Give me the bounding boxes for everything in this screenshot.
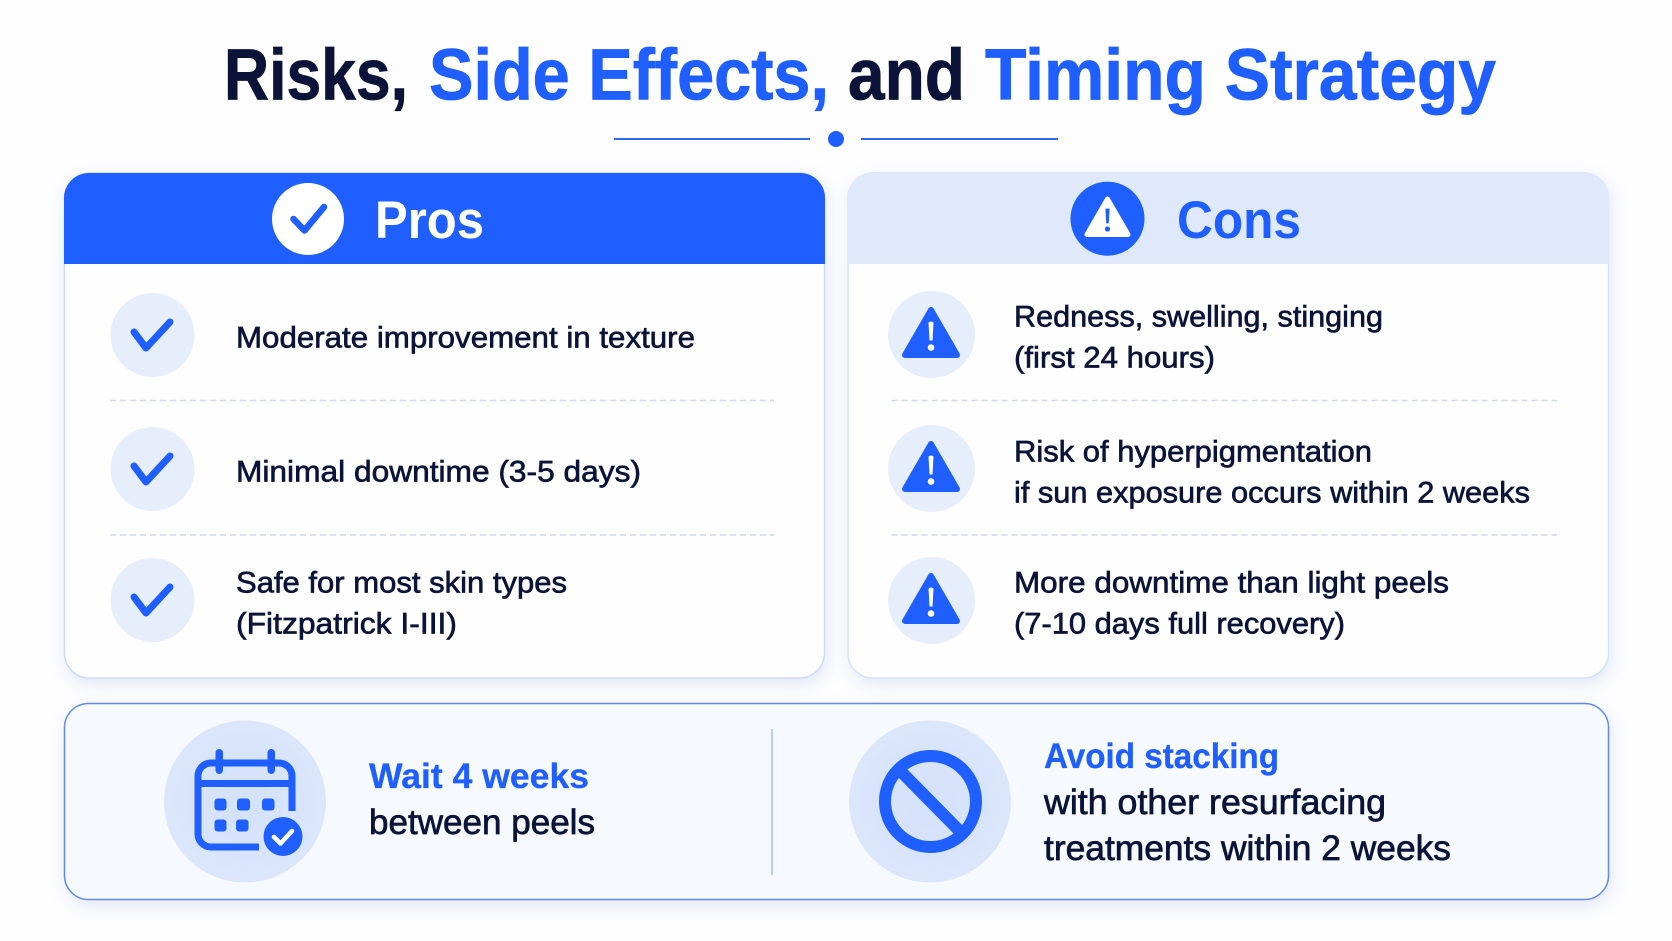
con item 2 text: if sun exposure occurs within 2 weeks — [1014, 476, 1530, 510]
timing panel background — [64, 704, 1608, 900]
title: Timing Strategy — [985, 36, 1496, 116]
icon: check 3 — [110, 558, 194, 642]
cons card background — [848, 173, 1608, 678]
pro item 3 text: (Fitzpatrick I-III) — [236, 608, 457, 640]
icon: no symbol — [849, 720, 1011, 882]
title: Side Effects, — [429, 36, 829, 116]
icon: check 1 — [110, 293, 194, 377]
con item 1 text — [1014, 300, 1383, 374]
panel: cons — [847, 173, 1609, 678]
pro item 3 text: Safe for most skin types — [236, 566, 567, 600]
icon: warning 3 — [888, 557, 975, 644]
con item 3 text: (7-10 days full recovery) — [1014, 608, 1345, 640]
panel: timing strategy — [64, 704, 1608, 900]
cons heading: Cons — [1177, 191, 1301, 250]
con item 2 text — [1014, 436, 1530, 510]
avoid text: with other resurfacing — [1043, 783, 1386, 822]
icon: cons header warning — [1070, 182, 1144, 256]
pros card background — [64, 173, 824, 678]
pro item 3 text — [236, 566, 567, 640]
cons header bar — [847, 173, 1609, 264]
title: Risks, — [224, 36, 408, 116]
icon: calendar — [164, 720, 326, 882]
avoid text: Avoid stacking — [1044, 737, 1279, 776]
con item 3 text — [1014, 566, 1449, 640]
panel: pros — [64, 173, 825, 678]
title — [224, 36, 1496, 116]
pro item 2 text: Minimal downtime (3-5 days) — [236, 456, 641, 488]
title divider — [614, 131, 1058, 147]
con item 1 text: Redness, swelling, stinging — [1014, 300, 1383, 334]
pros header bar — [64, 173, 825, 264]
avoid text: treatments within 2 weeks — [1044, 829, 1451, 868]
wait text: between peels — [369, 803, 595, 842]
con item 3 text: More downtime than light peels — [1014, 566, 1449, 600]
wait text — [369, 757, 595, 842]
pro item 1 text: Moderate improvement in texture — [236, 322, 695, 354]
con item 2 text: Risk of hyperpigmentation — [1014, 436, 1372, 468]
avoid text — [1043, 737, 1451, 868]
con item 1 text: (first 24 hours) — [1014, 342, 1215, 374]
icon: pros header check — [272, 183, 344, 255]
pros heading: Pros — [375, 191, 484, 250]
wait text: Wait 4 weeks — [369, 757, 589, 796]
icon: check 2 — [110, 427, 194, 511]
icon: warning 2 — [888, 425, 975, 512]
title: and — [848, 36, 965, 116]
icon: warning 1 — [888, 291, 975, 378]
